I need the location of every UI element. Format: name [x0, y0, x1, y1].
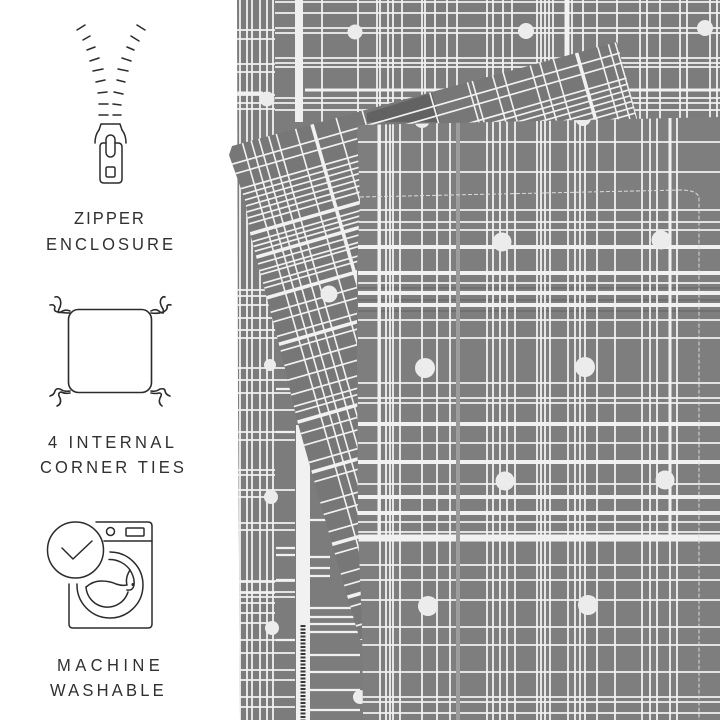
zipper seam strip lower [296, 425, 310, 720]
heading: 4 internal corner ties: CORNER TIES [40, 456, 187, 477]
panel: back duvet layer [237, 0, 720, 720]
pillowcase stitching [360, 190, 699, 720]
pattern dots on pillowcase [414, 110, 674, 616]
heading: machine washable: WASHABLE [50, 679, 167, 700]
icon: zipper [77, 25, 145, 183]
heading: machine washable: MACHINE [57, 654, 164, 675]
pattern dots on back layer [260, 20, 713, 704]
heading: machine washable [50, 654, 167, 700]
pattern dot on sheet [320, 286, 338, 302]
heading: 4 internal corner ties: 4 INTERNAL [48, 431, 177, 452]
heading: zipper enclosure: ZIPPER [74, 207, 146, 228]
panel: folded flat sheet [229, 42, 637, 640]
heading: 4 internal corner ties [40, 431, 187, 477]
icon: washing machine with check [48, 522, 152, 628]
panel: front folded pillowcase [355, 110, 720, 720]
heading: zipper enclosure [46, 207, 176, 254]
icon: square with corner ties [50, 297, 171, 406]
heading: zipper enclosure: ENCLOSURE [46, 233, 176, 254]
zipper seam strip upper [295, 0, 303, 122]
